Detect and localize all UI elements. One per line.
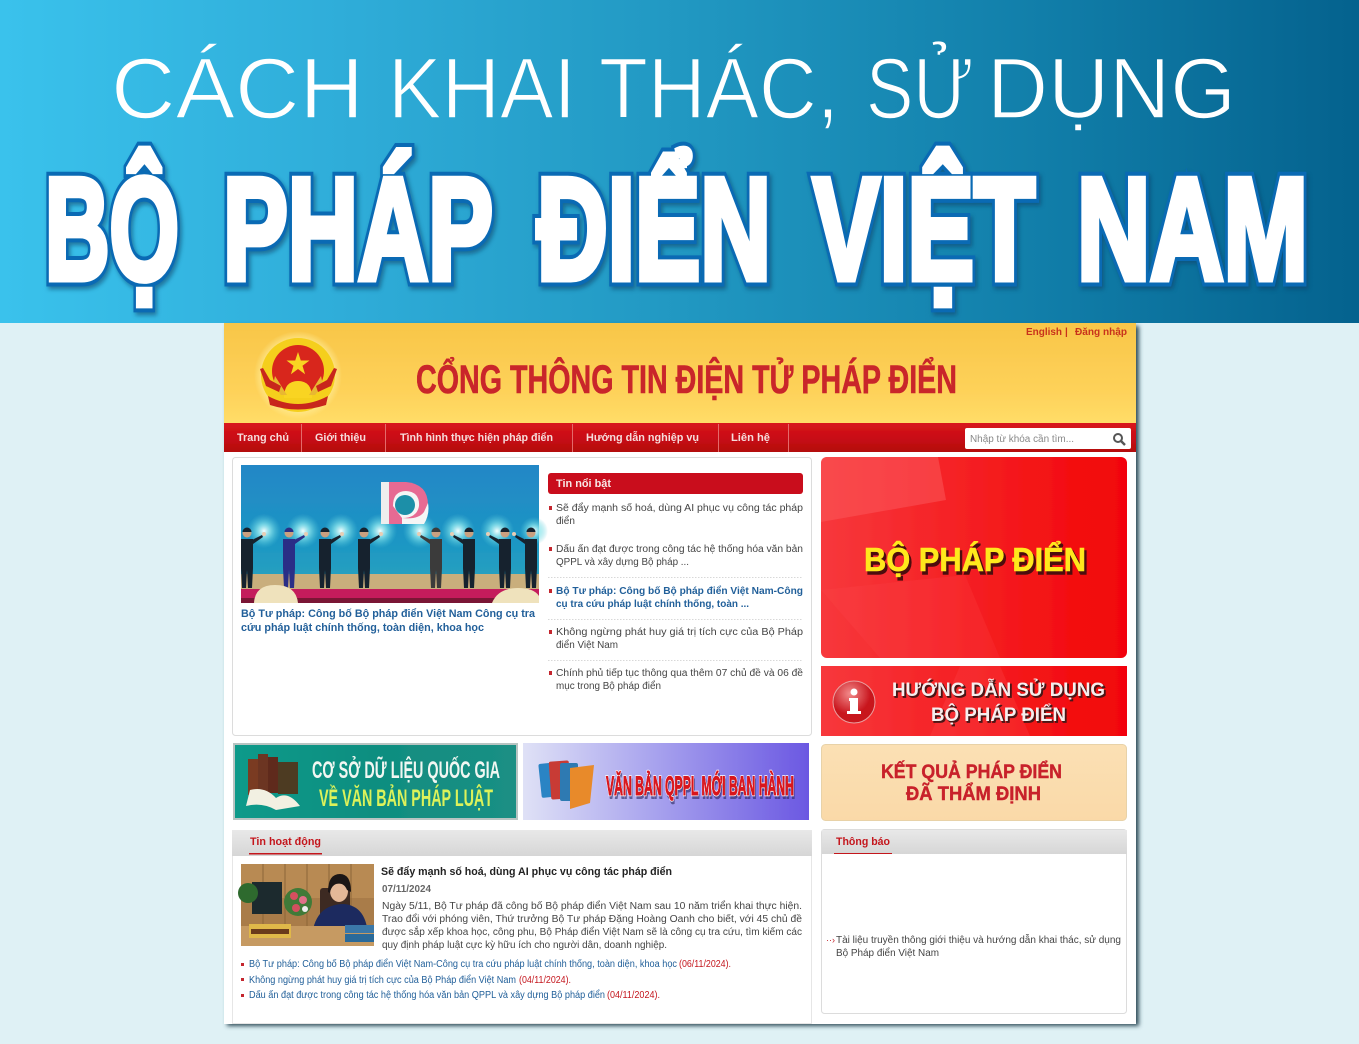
title line 2 — [45, 148, 1310, 313]
news list: Chính phủ tiếp tục thông qua thêm 07 chủ đề và 06 đề — [556, 667, 803, 679]
website screenshot — [224, 323, 1136, 1024]
title line 2: VIỆT — [813, 148, 1035, 310]
article summary: Ngày 5/11, Bộ Tư pháp đã công bố Bộ pháp điển Việt Nam sau 10 năm triển khai thực hiện. — [382, 900, 802, 912]
announcement text: Tài liệu truyền thông giới thiệu và hướng dẫn khai thác, sử dụng — [836, 933, 1121, 946]
navigation bar: Trang chủ — [237, 432, 289, 444]
article date: 07/11/2024 — [382, 884, 431, 895]
search box: Nhập từ khóa cần tìm... — [970, 433, 1074, 445]
article summary: được sắp xếp khoa học, công phu, Bộ Pháp điển Việt Nam sẽ là công cụ tra cứu, tìm kiếm các — [382, 925, 802, 938]
news list: điển Việt Nam — [556, 639, 618, 651]
title line 1: SỬ — [866, 41, 974, 137]
panel: usage guide button: BỘ PHÁP ĐIỂN — [931, 704, 1066, 726]
panel: announcements — [822, 830, 1127, 1014]
heading: announcements: Thông báo — [836, 836, 890, 848]
article summary: quy định pháp luật cực kỳ hữu ích cho người dân, doanh nghiệp. — [382, 940, 667, 951]
icon: books — [246, 754, 300, 810]
panel: usage guide button — [821, 666, 1127, 736]
panel: appraised results button: ĐÃ THẨM ĐỊNH — [906, 783, 1041, 805]
related links: Dấu ấn đạt được trong công tác hệ thống hóa văn bản QPPL và xây dựng Bộ pháp điển — [249, 989, 605, 1001]
banner: national legal database — [233, 743, 518, 820]
news list: Bộ Tư pháp: Công bố Bộ pháp điển Việt Nam-Công — [556, 585, 803, 597]
navigation bar — [224, 423, 1136, 452]
banner: national legal database: CƠ SỞ DỮ LIỆU QUỐC GIA — [312, 755, 500, 784]
panel: Bộ pháp điển button — [821, 457, 1127, 658]
icon: information — [833, 681, 875, 723]
icon: national emblem — [254, 331, 342, 419]
banner: national legal database: VỀ VĂN BẢN PHÁP LUẬT — [319, 783, 493, 812]
search box — [965, 428, 1131, 449]
title line 2: PHÁP — [223, 148, 493, 310]
website screenshot: VĂN BẢN QPPL MỚI BAN HÀNH — [606, 769, 794, 801]
navigation bar: Hướng dẫn nghiệp vụ — [586, 431, 699, 444]
news list: Sẽ đẩy mạnh số hoá, dùng AI phục vụ công tác pháp — [556, 502, 803, 514]
title line 2: ĐIỂN — [539, 151, 773, 313]
panel: Bộ pháp điển button: BỘ PHÁP ĐIỂN — [864, 540, 1086, 578]
news list: cụ tra cứu pháp luật chính thống, toàn ... — [556, 598, 749, 610]
website screenshot: VĂN BẢN QPPL MỚI BAN HÀNH — [607, 772, 795, 804]
title line 1: KHAI — [388, 41, 576, 137]
news list — [548, 502, 803, 692]
related links: Bộ Tư pháp: Công bố Bộ pháp điển Việt Nam-Công cụ tra cứu pháp luật chính thống, toàn diện, khoa học — [249, 958, 677, 970]
website screenshot shadow — [227, 326, 1139, 1026]
title line 2: BỘ — [45, 148, 179, 310]
panel: usage guide button: BỘ PHÁP ĐIỂN — [932, 706, 1068, 728]
news list: Không ngừng phát huy giá trị tích cực của Bộ Pháp — [556, 626, 803, 638]
heading: activity news — [249, 836, 322, 854]
heading: highlighted news — [548, 473, 803, 494]
heading: activity news: Tin hoạt động — [250, 836, 321, 848]
heading: highlighted news: Tin nổi bật — [556, 478, 611, 490]
site title: CỔNG THÔNG TIN ĐIỆN TỬ PHÁP ĐIỂN — [416, 355, 957, 402]
related links — [241, 958, 731, 1001]
title line 1: THÁC, — [599, 41, 839, 137]
panel: Bộ pháp điển button: BỘ PHÁP ĐIỂN — [866, 543, 1088, 581]
top links — [1026, 327, 1127, 338]
announcement text: ··› — [826, 935, 835, 945]
top links: | — [1065, 327, 1068, 338]
photo: deputy minister at desk — [238, 864, 374, 946]
title line 1: DỤNG — [987, 41, 1236, 137]
news list: mục trong Bộ pháp điển — [556, 680, 661, 692]
related links: (04/11/2024). — [519, 975, 571, 986]
title line 2: VIỆT — [813, 148, 1035, 310]
title line 2: BỘ — [45, 148, 179, 310]
title line 2: ĐIỂN — [537, 148, 771, 310]
title line 2: PHÁP — [225, 151, 495, 313]
header banner — [0, 0, 1359, 323]
title line 2: VIỆT — [815, 151, 1037, 313]
icon: folders — [538, 760, 594, 809]
navigation bar: Giới thiệu — [315, 432, 366, 444]
title line 1: CÁCH — [111, 41, 364, 137]
photo caption: cứu pháp luật chính thống, toàn diện, khoa học — [241, 622, 484, 634]
title line 2: PHÁP — [223, 148, 493, 310]
navigation bar: Liên hệ — [731, 432, 770, 444]
panel: appraised results button: KẾT QUẢ PHÁP ĐIỂN — [881, 761, 1062, 783]
related links: Không ngừng phát huy giá trị tích cực của Bộ Pháp điển Việt Nam — [249, 974, 516, 986]
related links: (04/11/2024). — [607, 990, 660, 1001]
banner: new legal documents — [523, 743, 809, 820]
related links: (06/11/2024). — [679, 959, 731, 970]
photo: launch ceremony — [241, 465, 548, 603]
panel: featured news — [232, 458, 812, 736]
navigation bar: Tình hình thực hiện pháp điển — [400, 432, 553, 444]
photo caption — [241, 608, 536, 634]
title line 2: BỘ — [47, 151, 181, 313]
article summary: Trao đổi với phóng viên, Thứ trưởng Bộ Tư pháp Đặng Hoàng Oanh cho biết, với 45 chủ đề — [382, 913, 802, 925]
article headline: Sẽ đẩy mạnh số hoá, dùng AI phục vụ công tác pháp điển — [381, 866, 672, 878]
photo caption: Bộ Tư pháp: Công bố Bộ pháp điển Việt Nam Công cụ tra — [241, 608, 536, 620]
panel: usage guide button: HƯỚNG DẪN SỬ DỤNG — [894, 680, 1106, 702]
top links: Đăng nhập — [1075, 327, 1127, 338]
title line 1 — [111, 41, 1236, 137]
article summary — [382, 900, 802, 951]
announcement text: Bộ Pháp điển Việt Nam — [836, 947, 939, 959]
news list: Dấu ấn đạt được trong công tác hệ thống hóa văn bản — [556, 543, 803, 555]
panel: activity news — [232, 830, 812, 1024]
site header — [224, 323, 1136, 423]
website screenshot: VĂN BẢN QPPL MỚI BAN HÀNH — [606, 769, 794, 801]
panel: usage guide button: HƯỚNG DẪN SỬ DỤNG — [892, 679, 1105, 701]
heading: announcements — [834, 836, 892, 854]
announcement text — [826, 933, 1121, 959]
top links: English — [1026, 327, 1062, 338]
news list: QPPL và xây dựng Bộ pháp ... — [556, 557, 689, 568]
news list: điển — [556, 515, 575, 527]
title line 2: ĐIỂN — [537, 148, 771, 310]
panel: appraised results button — [822, 744, 1126, 820]
